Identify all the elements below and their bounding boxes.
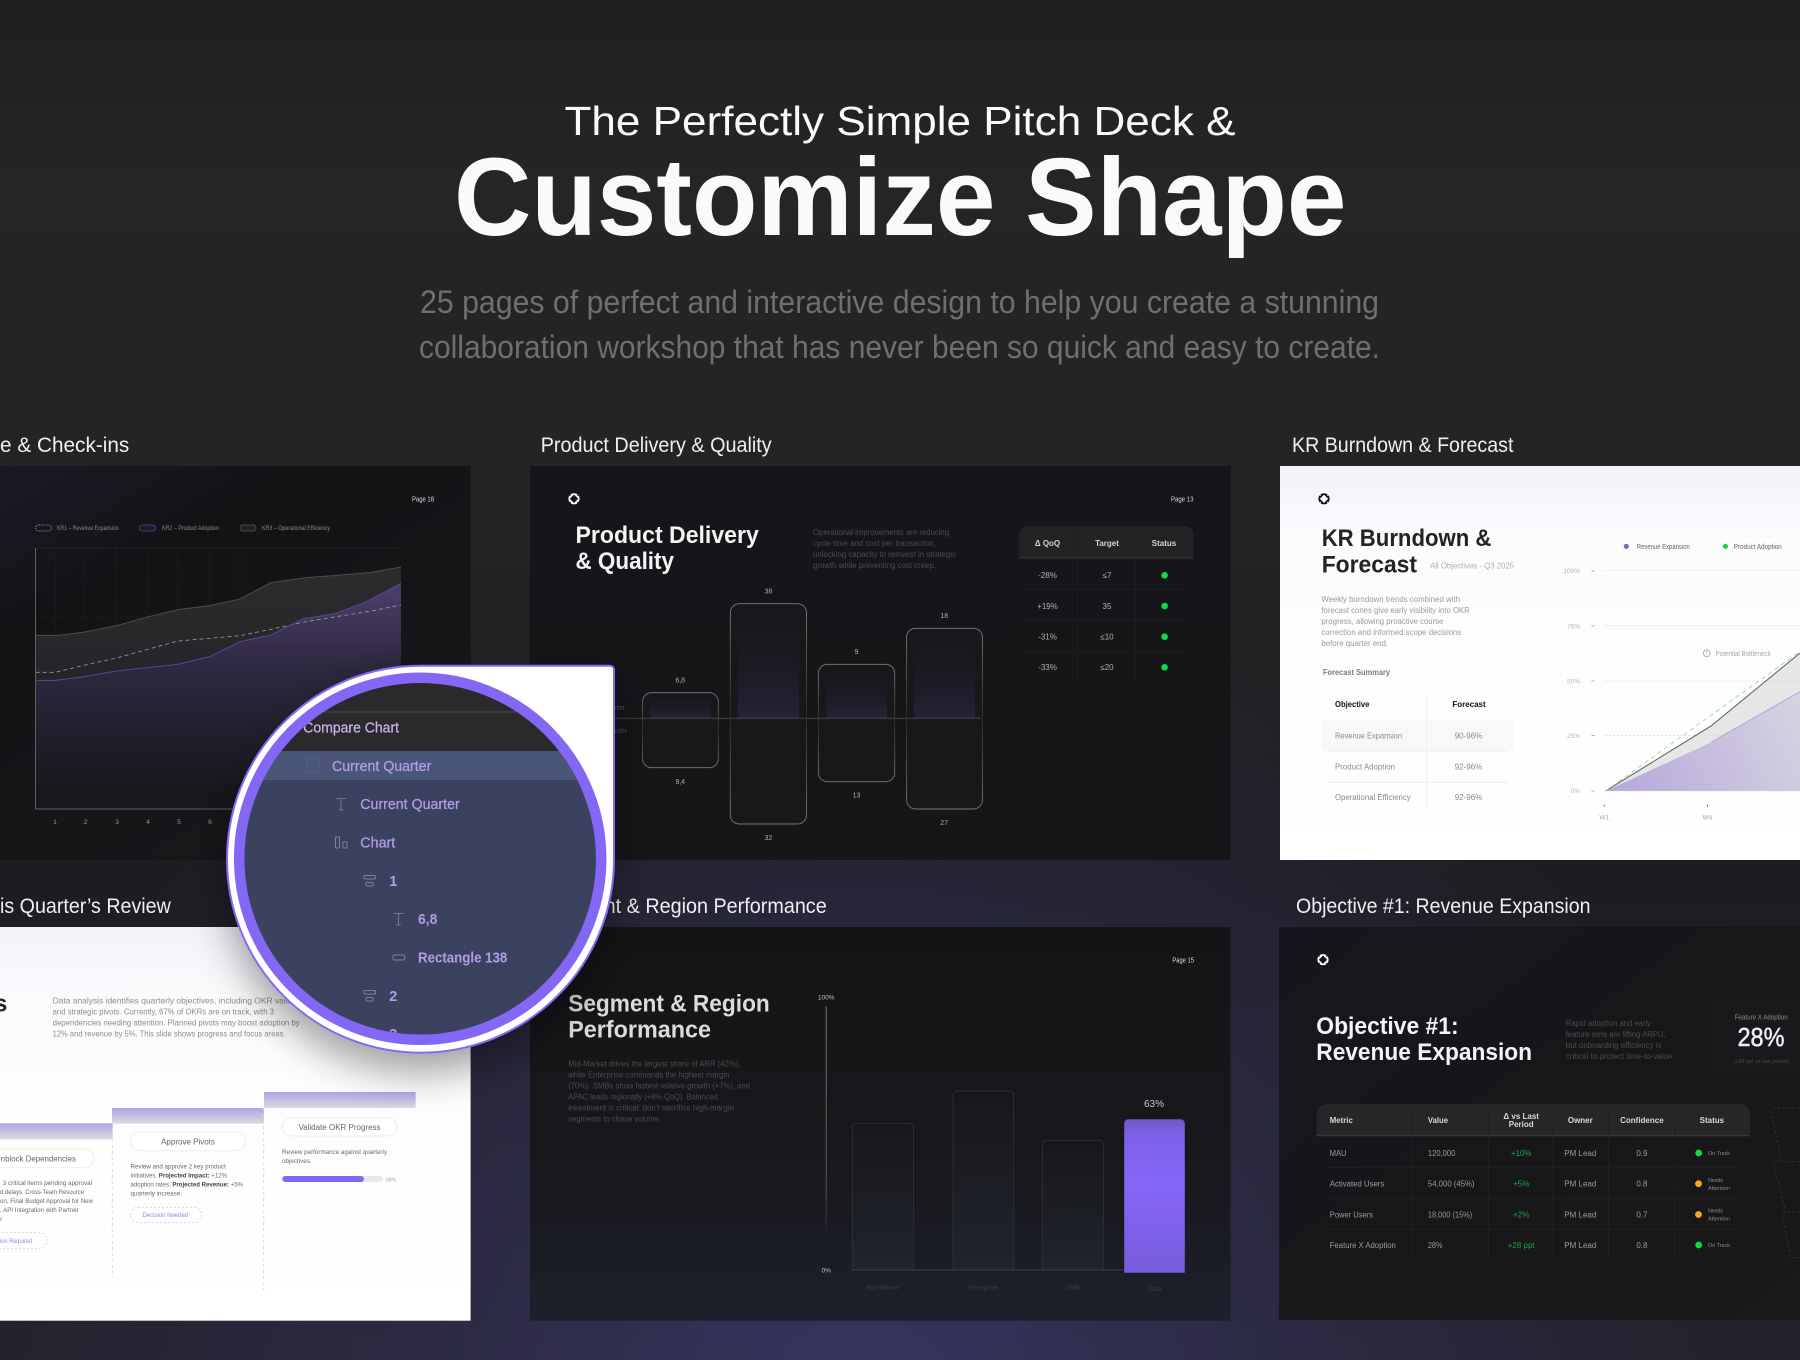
metrics table: Metric: [1330, 1116, 1353, 1125]
step: approve pivots: [130, 1132, 246, 1223]
page number: Page 15: [1172, 958, 1194, 964]
KPI table: ≤10: [1100, 632, 1114, 642]
step: validate OKR progress: Validate OKR Progress: [298, 1123, 381, 1132]
metrics table: On Track: [1708, 1151, 1730, 1157]
page number: Page 13: [1171, 496, 1194, 504]
description: unlocking capacity to reinvest in strategic: [813, 550, 956, 559]
stacked area chart: 4: [146, 819, 150, 826]
KPI table: ≤20: [1100, 663, 1114, 672]
burndown chart: 0%: [1571, 788, 1580, 795]
KPI table: +19%: [1037, 602, 1058, 611]
loupe frame: [227, 666, 614, 1053]
description: growth while preventing cost creep.: [813, 561, 936, 570]
header: [419, 98, 1380, 365]
panel heading: check-ins: e & Check-ins: [0, 434, 129, 457]
description: [1321, 595, 1470, 648]
KPI table: Target: [1095, 539, 1119, 548]
subtitle: collaboration workshop that has never been so quick and easy to create.: [419, 329, 1380, 365]
stacked area chart: 6: [208, 819, 212, 826]
chart legend: [1624, 544, 1782, 551]
forecast table: Product Adoption: [1335, 762, 1395, 771]
step: approve pivots: initiatives. Projected Impact: +12%: [130, 1172, 227, 1179]
mirrored bar chart: 9: [855, 649, 859, 656]
icon: bottleneck alert: [1703, 650, 1710, 657]
panel: segment and region slide: [530, 927, 1231, 1321]
mirrored bar chart: 27: [940, 820, 948, 827]
forecast table: 92-96%: [1455, 762, 1482, 771]
layer: group 1: 1: [389, 874, 397, 890]
metrics table: Power Users: [1330, 1210, 1373, 1220]
bar chart: 0%: [821, 1268, 831, 1275]
slide title: & Quality: [576, 548, 675, 575]
description: [1566, 1019, 1675, 1061]
description: investment is critical: don’t sacrifice high-margin: [568, 1103, 734, 1112]
mirrored bar chart: 9,4: [675, 779, 685, 786]
description: dependencies needing attention. Planned pivots may boost adoption by: [53, 1018, 300, 1027]
slide title: Product Delivery: [576, 522, 759, 549]
layer: group 2: 2: [389, 989, 397, 1005]
metrics table: 18,000 (15%): [1428, 1210, 1473, 1220]
step: approve pivots: Approve Pivots: [161, 1137, 215, 1146]
mirrored bar chart: 32: [765, 835, 772, 842]
step: approve pivots: adoption rates. Projected Revenue: +5%: [130, 1181, 243, 1188]
metrics table: [1317, 1104, 1750, 1257]
progress bar: 65%: [386, 1177, 396, 1183]
step: approve pivots: Decision Needed: [142, 1213, 188, 1219]
metrics table: PM Lead: [1564, 1180, 1596, 1188]
panel heading: product delivery: Product Delivery & Quality: [541, 434, 772, 457]
mirrored bar chart: Last Quarter: [588, 728, 628, 735]
description: Rapid adoption and early: [1566, 1019, 1651, 1028]
slide title: Forecast: [1322, 551, 1417, 578]
title line one: The Perfectly Simple Pitch Deck &: [564, 98, 1236, 144]
panel: objective slide: [1279, 927, 1800, 1321]
icon: logo: [1317, 954, 1329, 966]
description: forecast cones give early visibility into OKR: [1321, 606, 1470, 615]
forecast table: 90-96%: [1455, 731, 1482, 740]
description: [53, 996, 311, 1038]
metrics table: Attention: [1708, 1217, 1730, 1223]
step: unblock dependencies: n: [0, 1216, 2, 1223]
metrics table: +5%: [1513, 1180, 1529, 1188]
layer: group 3: [374, 1028, 396, 1033]
description: critical to protect time-to-value.: [1566, 1052, 1675, 1061]
layer: group 2: [364, 990, 397, 1002]
metrics table: 54,000 (45%): [1428, 1180, 1475, 1188]
burndown chart: 100%: [1563, 568, 1580, 575]
description: and strategic pivots. Currently, 67% of OKRs are on track, with 3: [53, 1007, 275, 1016]
description: segments to chase volume.: [568, 1114, 661, 1123]
burndown chart: [1563, 544, 1800, 822]
metrics table: Feature X Adoption: [1330, 1241, 1396, 1250]
step bars: [0, 1092, 416, 1139]
panel heading: KR burndown: KR Burndown & Forecast: [1292, 434, 1514, 457]
subtitle: All Objectives - Q3 2025: [1430, 562, 1515, 571]
bar chart: Total: [1148, 1286, 1162, 1293]
metrics table: 28%: [1428, 1241, 1442, 1250]
slide title: [1316, 1013, 1532, 1066]
step: approve pivots: Review and approve 2 key product: [130, 1163, 226, 1170]
page number: Page 18: [412, 496, 434, 504]
metrics table: Needs: [1708, 1209, 1723, 1215]
metrics table: Confidence: [1620, 1116, 1664, 1125]
description: before quarter end.: [1321, 639, 1388, 648]
description: Data analysis identifies quarterly objectives, including OKR validation: [53, 996, 311, 1005]
description: Weekly burndown trends combined with: [1321, 595, 1460, 604]
burndown chart: 50%: [1567, 678, 1580, 686]
burndown chart: W4: [1703, 814, 1713, 822]
description: correction and informed scope decisions: [1321, 628, 1461, 637]
bar chart: 63%: [1144, 1099, 1164, 1110]
metrics table: +2%: [1513, 1210, 1529, 1220]
slide title: Segment & Region: [568, 990, 770, 1017]
step: validate OKR progress: objectives.: [282, 1158, 312, 1165]
burndown chart: W1: [1599, 814, 1610, 822]
KPI table: Status: [1152, 539, 1177, 548]
forecast table: 92-96%: [1455, 793, 1482, 802]
metrics table: PM Lead: [1564, 1210, 1596, 1220]
mirrored bar chart: 6,8: [675, 678, 685, 684]
KPI card: 28%: [1738, 1022, 1784, 1052]
forecast table: Forecast Summary: [1323, 668, 1391, 677]
metrics table: Owner: [1568, 1116, 1593, 1125]
metrics table: 0.8: [1636, 1241, 1648, 1250]
bar chart: SMB: [1066, 1284, 1080, 1292]
step: unblock dependencies: , API Integration with Partner: [0, 1207, 79, 1214]
layer: compare chart: Compare Chart: [303, 720, 399, 736]
metrics table: Value: [1428, 1116, 1449, 1125]
metrics table: 120,000: [1428, 1149, 1456, 1158]
forecast table: Objective: [1335, 700, 1370, 709]
metrics table: Activated Users: [1330, 1180, 1384, 1188]
panel: KR burndown slide: [1280, 466, 1800, 860]
forecast table: Revenue Expansion: [1335, 731, 1402, 740]
KPI table: -33%: [1038, 663, 1057, 672]
panel heading: segment: Segment & Region Performance: [542, 895, 827, 918]
metrics table: PM Lead: [1564, 1149, 1596, 1158]
layer: current quarter group: Current Quarter: [332, 759, 431, 775]
magnifier callout: layer panel: [227, 666, 614, 1053]
layer: group 3: 3: [389, 1027, 397, 1043]
step: validate OKR progress: Review performance against quarterly: [282, 1149, 388, 1156]
step: unblock dependencies: 3 critical items pending approval: [3, 1180, 93, 1187]
metrics table: 0.9: [1636, 1149, 1648, 1158]
forecast table: Operational Efficiency: [1335, 793, 1411, 802]
slide title: KR Burndown &: [1322, 525, 1491, 552]
step: unblock dependencies: d delays. Cross-Team Resource: [0, 1189, 84, 1196]
metrics table: Period: [1509, 1120, 1534, 1129]
forecast table: Forecast: [1452, 700, 1486, 709]
KPI table: -31%: [1038, 632, 1057, 642]
metrics table: +28 ppt: [1508, 1241, 1535, 1250]
step: unblock dependencies: on, Final Budget Approval for New: [0, 1198, 93, 1205]
subtitle: 25 pages of perfect and interactive design to help you create a stunning: [420, 284, 1379, 320]
description: [567, 1059, 750, 1123]
stacked area chart: 2: [84, 819, 88, 826]
description: 12% and revenue by 5%. This slide shows progress and focus areas.: [53, 1029, 285, 1038]
step: approve pivots: quarterly increase.: [130, 1190, 182, 1197]
metrics table: +10%: [1511, 1149, 1532, 1158]
bar chart: Enterprise: [968, 1284, 998, 1292]
mirrored bar chart: Current Quarter: [576, 705, 626, 712]
mirrored bar chart: 13: [853, 792, 860, 800]
mirrored bar chart: [576, 588, 982, 842]
layer: rectangle 138: Rectangle 138: [418, 950, 507, 966]
KPI card: (+28 ppt vs last period): [1733, 1059, 1789, 1065]
slide title: [1322, 525, 1491, 578]
step: validate OKR progress: [282, 1118, 397, 1183]
metrics table: MAU: [1330, 1149, 1347, 1158]
metrics table: Attention: [1708, 1186, 1730, 1192]
slide title: [576, 522, 759, 575]
slide title: Objective #1:: [1316, 1013, 1459, 1040]
description: Mid-Market drives the largest share of ARR (42%),: [568, 1059, 740, 1068]
panel: check-ins slide: [0, 466, 471, 860]
loupe purple ring: [239, 678, 601, 1040]
slide title: Revenue Expansion: [1316, 1039, 1532, 1066]
title line two: Customize Shape: [454, 136, 1346, 259]
chart legend: KR1 – Revenue Expansion: [57, 525, 119, 532]
chart legend: KR2 – Product Adoption: [162, 525, 219, 532]
layer: 6,8: 6,8: [418, 912, 437, 928]
icon: logo: [568, 493, 580, 505]
slide title: Performance: [568, 1016, 711, 1043]
chart legend: [36, 525, 331, 532]
KPI table: Δ QoQ: [1035, 539, 1060, 548]
layer: chart: [335, 836, 396, 848]
layer: rectangle 138: [392, 952, 507, 966]
layer: chart: Chart: [360, 836, 395, 852]
layer: current quarter text: Current Quarter: [360, 797, 460, 813]
burndown chart: 75%: [1567, 624, 1580, 630]
metrics table: On Track: [1708, 1243, 1730, 1249]
description: cycle time and cost per transaction,: [813, 539, 936, 548]
panel heading: objective: Objective #1: Revenue Expansion: [1296, 895, 1590, 918]
layer list: [263, 683, 577, 1033]
description: progress, allowing proactive course: [1321, 617, 1444, 626]
bar chart: Mid-Market: [866, 1284, 899, 1292]
metrics table: PM Lead: [1564, 1241, 1596, 1250]
KPI card: [1734, 1014, 1789, 1064]
forecast table: [1321, 668, 1513, 810]
description: while Enterprise commands the highest margin: [567, 1070, 729, 1079]
panel: quarter review slide: [0, 927, 471, 1321]
description: APAC leads regionally (+8% QoQ). Balanced: [568, 1092, 718, 1101]
metrics table: Δ vs Last: [1503, 1112, 1539, 1121]
bar chart: 100%: [818, 994, 835, 1002]
metrics table: Status: [1700, 1116, 1725, 1125]
stacked area chart: 1: [53, 819, 57, 826]
callout: Potential Bottleneck: [1716, 651, 1771, 658]
icon: logo: [1318, 493, 1330, 505]
KPI table: 35: [1103, 602, 1112, 611]
KPI table: ≤7: [1103, 571, 1112, 580]
stacked area chart: 3: [115, 819, 119, 826]
stacked area chart: [36, 548, 401, 826]
description: Operational improvements are reducing: [813, 528, 949, 537]
panel heading: quarter review: is Quarter’s Review: [0, 895, 172, 918]
chart legend: Revenue Expansion: [1637, 544, 1690, 551]
bar chart: [818, 994, 1185, 1293]
description: feature wins are lifting ARPU,: [1566, 1030, 1666, 1039]
chart legend: Product Adoption: [1734, 544, 1782, 551]
chart legend: KR3 – Operational Efficiency: [262, 525, 331, 532]
mirrored bar chart: 38: [765, 588, 772, 596]
KPI table: -28%: [1038, 571, 1057, 580]
burndown chart: 25%: [1567, 733, 1580, 740]
KPI table: [1019, 526, 1194, 680]
dashed funnel shapes: [1771, 1108, 1800, 1258]
layer: 6,8: [394, 913, 437, 926]
description: but onboarding efficiency is: [1566, 1041, 1662, 1050]
step: unblock dependencies: [0, 1149, 94, 1248]
layer: group 1: [364, 875, 397, 886]
metrics table: Needs: [1708, 1178, 1723, 1184]
panel: product delivery slide: [530, 466, 1231, 860]
stacked area chart: 5: [177, 819, 181, 826]
step: unblock dependencies: ion Required: [0, 1239, 32, 1245]
description: (70%). SMBs show fastest relative growth (+7%), and: [568, 1081, 750, 1090]
KPI card: Feature X Adoption: [1735, 1015, 1788, 1022]
description: [813, 528, 956, 570]
metrics table: 0.8: [1636, 1180, 1648, 1188]
subtitle: [419, 284, 1380, 365]
mirrored bar chart: 18: [940, 613, 948, 620]
metrics table: 0.7: [1636, 1210, 1648, 1220]
slide title: [568, 990, 770, 1043]
